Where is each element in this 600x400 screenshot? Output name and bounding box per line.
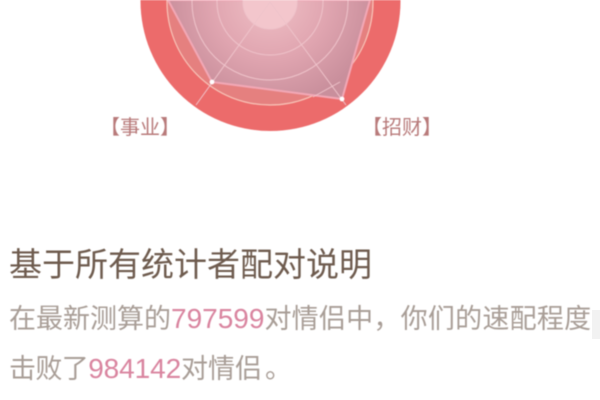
rings and axes bbox=[192, 0, 348, 105]
label: wealth: 【招财】 bbox=[362, 117, 442, 139]
inner disc bbox=[167, 0, 373, 105]
body line 1: 在最新测算的797599对情侣中，你们的速配程度 bbox=[9, 303, 591, 334]
label: career: 【事业】 bbox=[100, 117, 180, 139]
radar polygon bbox=[168, 0, 370, 99]
body line 2: 击败了984142对情侣。 bbox=[9, 353, 292, 384]
vertex dots bbox=[210, 80, 344, 101]
right edge shadow bbox=[592, 310, 600, 339]
heading: 基于所有统计者配对说明 bbox=[9, 246, 372, 283]
radar chart bbox=[140, 0, 402, 132]
outer disc bbox=[140, 0, 400, 131]
